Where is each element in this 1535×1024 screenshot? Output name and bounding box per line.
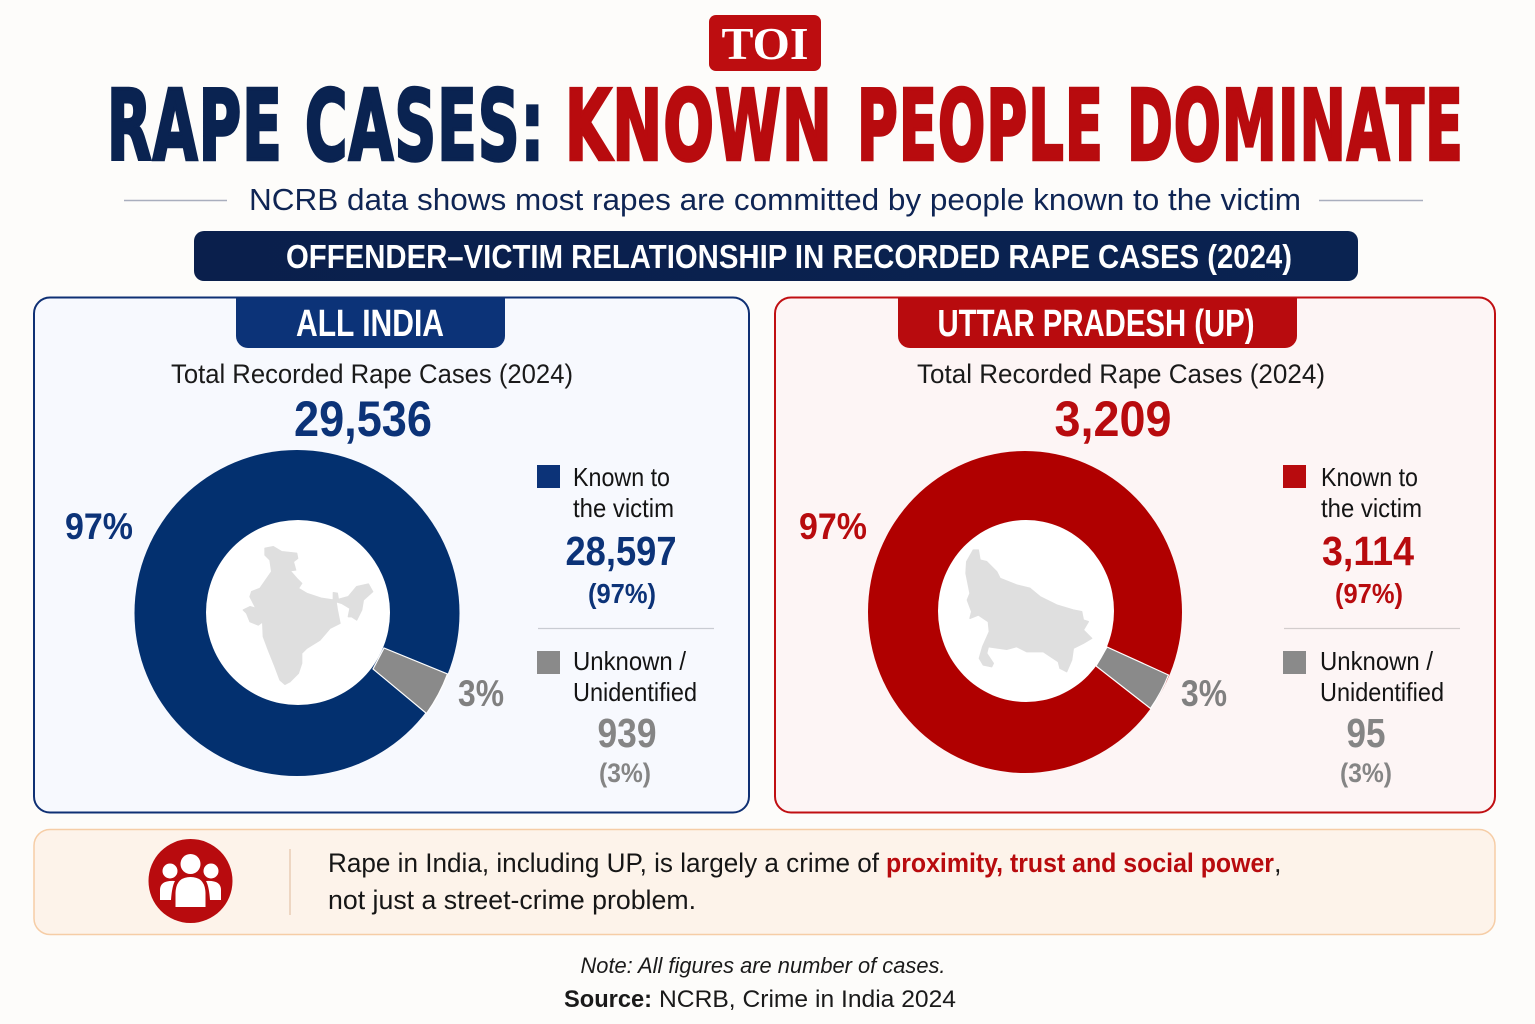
legend: known — [1283, 462, 1422, 609]
total number: 3,209 — [1054, 391, 1172, 447]
icon: Uttar Pradesh map — [966, 550, 1092, 672]
total label: Total Recorded Rape Cases (2024) — [171, 359, 573, 389]
label: 3%: 3% — [458, 673, 504, 714]
title: PEOPLE — [857, 70, 1104, 182]
legend: known: Known to — [573, 462, 670, 492]
panel: All India — [34, 298, 749, 812]
legend: unknown: 939 — [598, 710, 656, 756]
total label: Total Recorded Rape Cases (2024) — [917, 359, 1325, 389]
section banner: OFFENDER–VICTIM RELATIONSHIP IN RECORDED RAPE CASES (2024) — [286, 238, 1292, 275]
callout text: proximity, trust and social power — [886, 848, 1274, 878]
legend: unknown: Unidentified — [573, 677, 697, 707]
legend: known: Known to — [1321, 462, 1418, 492]
title: RAPE — [107, 70, 283, 182]
callout — [34, 830, 1495, 934]
note: Note: All figures are number of cases. — [580, 953, 946, 978]
legend: known: (97%) — [1335, 578, 1403, 609]
legend: unknown: Unknown / — [1320, 646, 1434, 676]
icon: India map — [243, 547, 373, 684]
legend: unknown — [1283, 646, 1444, 788]
donut chart — [134, 450, 460, 776]
title — [107, 70, 1464, 182]
legend: unknown: Unidentified — [1320, 677, 1444, 707]
panel: Uttar Pradesh — [775, 298, 1495, 812]
section banner — [194, 231, 1358, 281]
total number: 29,536 — [294, 391, 432, 447]
source: Source: — [564, 986, 652, 1013]
panel tab: Uttar Pradesh: UTTAR PRADESH (UP) — [938, 303, 1254, 345]
logo: TOI — [709, 15, 821, 71]
label: 97%: 97% — [799, 506, 867, 547]
panel background — [775, 298, 1495, 812]
donut chart — [868, 451, 1182, 773]
panel tab: Uttar Pradesh — [898, 298, 1297, 348]
label: 3%: 3% — [1181, 673, 1227, 714]
panel tab: All India — [236, 298, 505, 348]
legend: known: 28,597 — [566, 528, 676, 574]
callout text — [328, 848, 1282, 915]
icon: people group — [148, 839, 232, 923]
logo: TOI: TOI — [722, 18, 808, 69]
legend: unknown — [537, 646, 697, 788]
legend: unknown: 95 — [1346, 710, 1386, 756]
label: 97%: 97% — [65, 506, 133, 547]
legend: known: the victim — [573, 493, 674, 523]
panel tab: All India: ALL INDIA — [296, 303, 444, 345]
legend: known — [537, 462, 676, 609]
legend: known: 3,114 — [1322, 528, 1414, 574]
title: KNOWN — [565, 70, 833, 182]
callout text: , — [1274, 848, 1282, 878]
legend: unknown: (3%) — [1340, 758, 1392, 788]
legend: unknown: (3%) — [599, 758, 651, 788]
title: CASES: — [305, 70, 545, 182]
source: NCRB, Crime in India 2024 — [659, 986, 956, 1013]
legend: unknown: Unknown / — [573, 646, 687, 676]
callout text: not just a street-crime problem. — [328, 885, 696, 915]
panel background — [34, 298, 749, 812]
legend: known: (97%) — [588, 578, 656, 609]
callout text: Rape in India, including UP, is largely a crime of — [328, 848, 879, 878]
legend: known: the victim — [1321, 493, 1422, 523]
subtitle: NCRB data shows most rapes are committed by people known to the victim — [249, 182, 1301, 217]
